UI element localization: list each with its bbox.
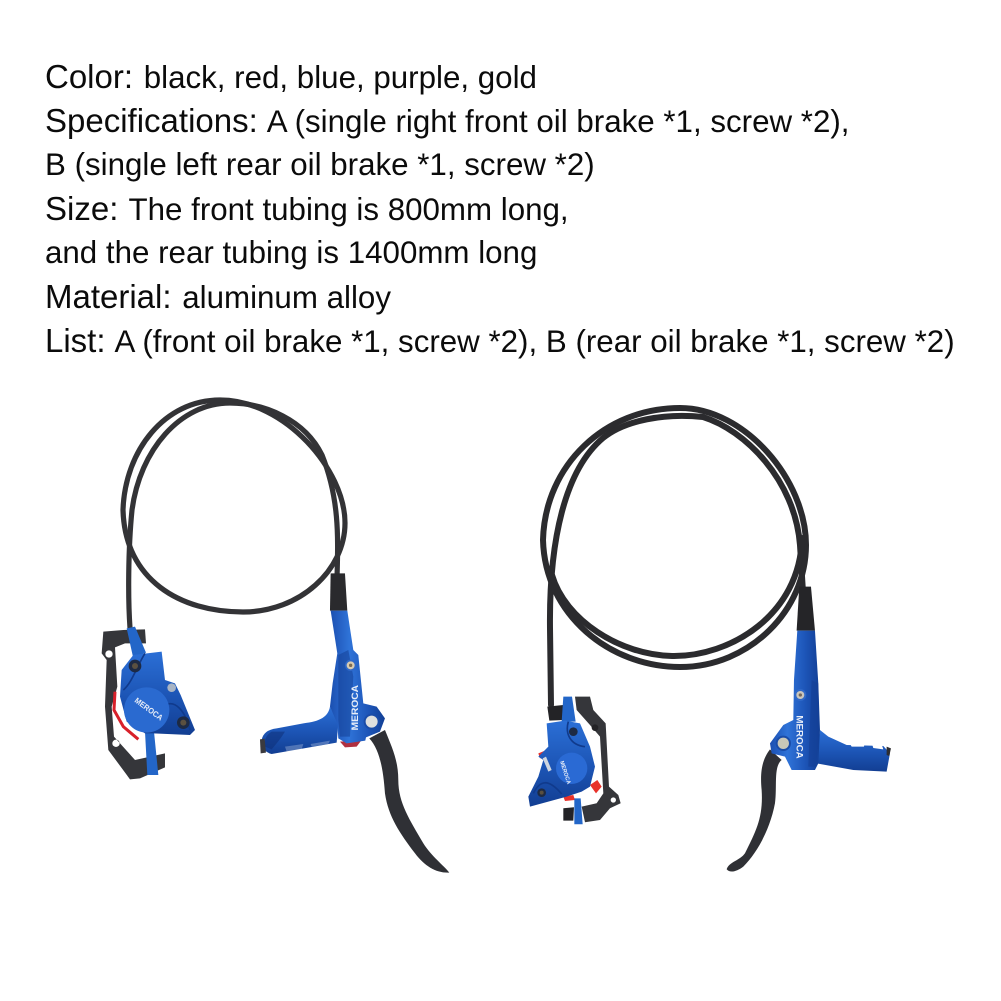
caliper bolts (129, 660, 141, 672)
lever blade (369, 730, 449, 873)
right caliper (528, 697, 621, 824)
hose collar (797, 587, 815, 631)
mounting bracket (102, 629, 165, 779)
handlebar clamp (262, 707, 338, 754)
lever bolts (345, 660, 356, 671)
left hose (123, 400, 345, 628)
brand label: MEROCA (795, 715, 805, 759)
right brake lever (727, 587, 891, 872)
left caliper (102, 627, 195, 779)
left brake set (102, 400, 449, 873)
caliper body (120, 652, 195, 735)
caliper bolts (569, 727, 578, 736)
size line front tubing: Size: The front tubing is 800mm long, (45, 190, 569, 227)
brake pad red (114, 692, 138, 739)
brand label: MEROCA (350, 685, 360, 730)
right hose (543, 408, 806, 705)
handlebar clamp (817, 730, 890, 772)
lever body (330, 611, 385, 743)
specifications line B: B (single left rear oil brake *1, screw *2) (45, 147, 595, 182)
caliper brand label: MEROCA (133, 696, 165, 723)
lever blade (727, 749, 782, 872)
caliper tabs (127, 627, 158, 775)
caliper brand label: MEROCA (558, 760, 571, 785)
lever body (770, 631, 820, 770)
size line rear tubing: and the rear tubing is 1400mm long (45, 235, 537, 270)
mounting bracket (575, 697, 621, 822)
brake pad red (538, 751, 602, 801)
right brake set (528, 408, 891, 872)
hose banjo bolts (547, 705, 574, 821)
hose collar (330, 573, 347, 611)
lever bolts (794, 689, 806, 701)
left brake lever (260, 573, 449, 873)
caliper tabs (562, 697, 583, 824)
specification text block (45, 58, 955, 359)
specifications line A: Specifications: A (single right front oil brake *1, screw *2), (45, 102, 849, 139)
caliper body (528, 721, 595, 807)
color line: Color: black, red, blue, purple, gold (45, 58, 537, 95)
material line: Material: aluminum alloy (45, 278, 391, 315)
list line: List: A (front oil brake *1, screw *2), B (rear oil brake *1, screw *2) (45, 322, 955, 359)
